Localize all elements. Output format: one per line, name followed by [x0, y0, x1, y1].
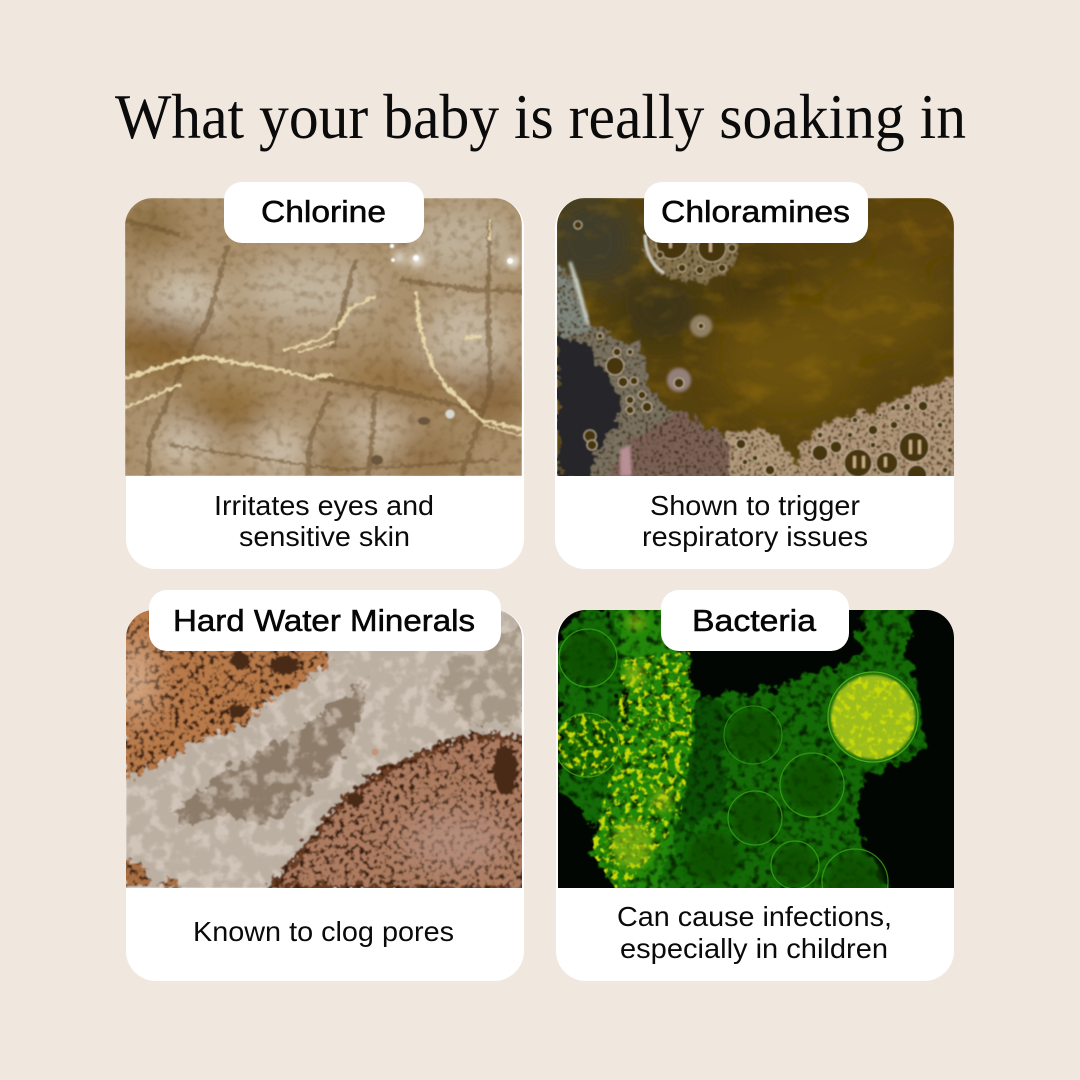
- card background: hard water minerals: [126, 610, 524, 981]
- description: bacteria: Can cause infections,: [617, 901, 892, 932]
- panel: bacteria: [555, 590, 954, 981]
- photo: green bacteria micrograph: [558, 610, 954, 888]
- label pill: Bacteria: Bacteria: [692, 603, 817, 638]
- bright bacterium: [827, 671, 919, 763]
- description: chlorine: Irritates eyes and: [214, 490, 434, 521]
- label pill: Chloramines: Chloramines: [661, 194, 850, 229]
- label pill: Hard Water Minerals: Hard Water Minerals: [173, 603, 475, 638]
- photo: mineral deposits: [120, 605, 530, 890]
- card background: bacteria: [556, 610, 954, 981]
- description: chloramines: Shown to trigger: [650, 490, 860, 521]
- foam cluster top: [645, 214, 739, 282]
- panel: hard water minerals: [120, 590, 530, 981]
- label pill: Chlorine: Chlorine: [261, 194, 386, 229]
- card background: chloramines: [555, 198, 954, 569]
- label pill: Chloramines: [644, 182, 868, 243]
- label pill: Hard Water Minerals: [149, 590, 501, 651]
- photo: chlorine water texture: [110, 198, 525, 485]
- description: hard water minerals: Known to clog pores: [193, 916, 454, 947]
- card background: chlorine: [126, 198, 524, 569]
- description: chloramines: respiratory issues: [642, 521, 868, 552]
- label pill: Bacteria: [661, 590, 849, 651]
- label pill: Chlorine: [224, 182, 424, 243]
- panel: chlorine: [110, 182, 525, 569]
- title: What your baby is really soaking in: [115, 81, 966, 152]
- description: chlorine: sensitive skin: [239, 521, 410, 552]
- panel: chloramines: [540, 182, 970, 569]
- photo: chloramines foam: [557, 198, 954, 476]
- description: bacteria: especially in children: [620, 933, 888, 964]
